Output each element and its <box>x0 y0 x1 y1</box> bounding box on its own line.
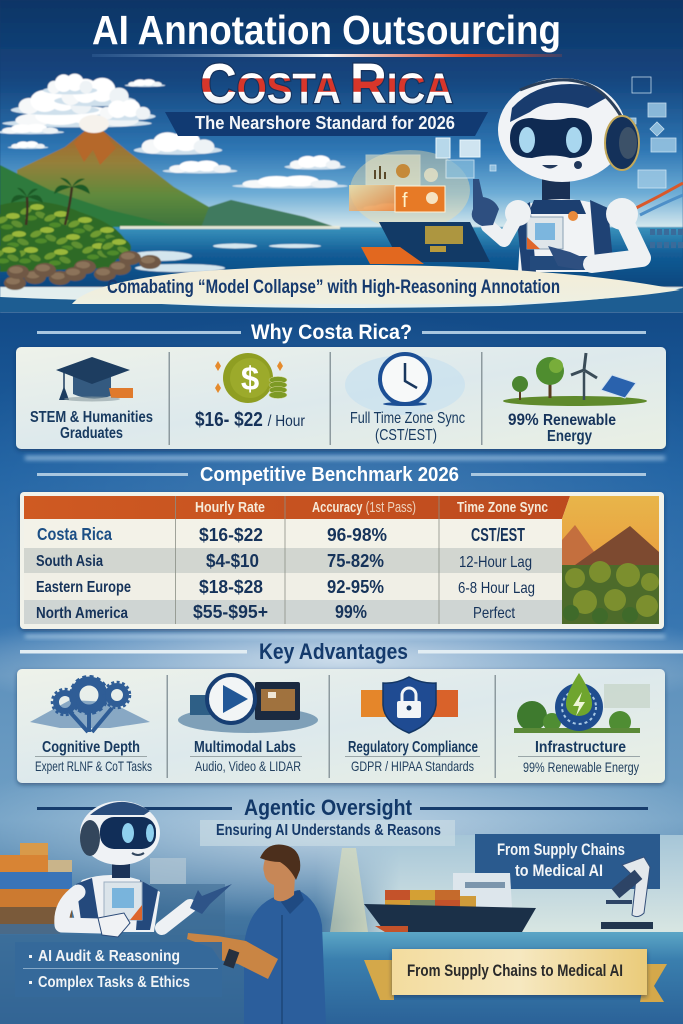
section heading: Competitive Benchmark 2026 <box>37 464 646 486</box>
section heading: Competitive Benchmark 2026: Competitive Benchmark 2026 <box>200 464 459 486</box>
robot head <box>498 78 626 182</box>
section heading: Why Costa Rica?: Why Costa Rica? <box>251 321 412 344</box>
light strip <box>25 456 665 460</box>
text: renewable energy <box>508 410 616 445</box>
icon: gears <box>30 676 150 732</box>
row: North America: Perfect <box>473 605 515 622</box>
tagline: Comabating “Model Collapse” with High-Reasoning Annotation <box>107 277 560 298</box>
table rows <box>24 519 562 548</box>
icon: infrastructure <box>514 673 650 733</box>
section heading: Key Advantages: Key Advantages <box>259 639 408 664</box>
callout: from supply chains box: From Supply Chains <box>497 841 625 859</box>
row: South Asia: 12-Hour Lag <box>459 554 532 571</box>
volcano smoke <box>79 115 109 133</box>
row: Eastern Europe: Eastern Europe <box>36 579 131 596</box>
clouds <box>0 74 444 211</box>
surf <box>120 226 340 272</box>
row: South Asia: 75-82% <box>327 551 384 571</box>
row: Eastern Europe <box>36 577 535 597</box>
text: STEM graduates: STEM & Humanities <box>30 409 153 426</box>
floating UI icons <box>490 77 676 188</box>
hologram data panels: f <box>402 190 408 212</box>
row: South Asia: $4-$10 <box>206 551 259 571</box>
row: Costa Rica: $16-$22 <box>199 525 263 545</box>
icon: clock <box>380 354 430 406</box>
panel: benchmark table <box>20 492 664 629</box>
robot illustration (top) <box>472 78 642 272</box>
robot head <box>80 801 160 865</box>
row: Costa Rica <box>37 524 525 545</box>
volcano <box>0 115 335 250</box>
text: regulatory compliance: Regulatory Compliance <box>348 739 478 756</box>
callout: from supply chains box <box>475 834 660 889</box>
subtitle banner: The Nearshore Standard for 2026 <box>195 113 455 133</box>
panel: why costa rica <box>16 347 666 449</box>
rocks <box>4 251 161 290</box>
text: infrastructure <box>518 739 640 775</box>
text: hourly rate: $16- $22 / Hour <box>195 409 306 431</box>
robot illustration (bottom) <box>62 801 232 937</box>
section heading: Key Advantages <box>20 639 683 664</box>
ribbon banner <box>364 949 667 1002</box>
light strip <box>25 635 665 638</box>
icon: microscope <box>601 857 653 929</box>
row: North America: $55-$95+ <box>193 602 268 622</box>
icon: multimodal play <box>178 675 318 733</box>
icon: graduation cap <box>56 357 133 402</box>
text: cognitive depth: Expert RLNF & CoT Tasks <box>35 758 152 774</box>
icon: renewable landscape <box>503 353 647 406</box>
ocean <box>0 227 683 287</box>
heading: Agentic Oversight <box>37 795 648 820</box>
row: Costa Rica: Costa Rica <box>37 524 112 544</box>
agentic scene background <box>150 820 683 1014</box>
torso <box>244 890 326 1024</box>
robot torso <box>70 875 160 932</box>
control platform <box>379 222 490 262</box>
person illustration <box>187 844 326 1024</box>
list: AI audit: AI Audit & Reasoning <box>38 948 180 965</box>
text: time zone sync: (CST/EST) <box>375 427 437 444</box>
robot body <box>518 199 614 272</box>
image: sunset mountain forest <box>562 496 659 624</box>
icon: coin: $ <box>241 360 259 397</box>
subheading: Ensuring AI Understands & Reasons <box>216 822 441 839</box>
text: multimodal labs <box>190 739 302 774</box>
ribbon banner: From Supply Chains to Medical AI <box>407 962 623 980</box>
icon: coin <box>215 353 287 403</box>
row: South Asia: South Asia <box>36 553 103 570</box>
head <box>263 851 299 901</box>
text: renewable energy: Energy <box>547 428 592 445</box>
section heading: Why Costa Rica? <box>37 321 646 344</box>
sea <box>310 932 683 1024</box>
row: North America: North America <box>36 605 128 622</box>
hologram data panels <box>349 138 490 264</box>
pointing arm <box>187 933 278 979</box>
robot right arm <box>606 198 638 230</box>
icon: compliance shield <box>361 677 458 733</box>
sand banner shape <box>0 265 683 312</box>
decorative arcs <box>636 183 683 245</box>
text: time zone sync <box>350 410 465 444</box>
text: infrastructure: 99% Renewable Energy <box>523 759 639 775</box>
title underline <box>92 54 562 57</box>
row: Costa Rica: 96-98% <box>327 525 387 545</box>
row: Eastern Europe: 92-95% <box>327 577 384 597</box>
robot arm right <box>162 906 190 928</box>
shipping containers <box>0 843 72 934</box>
heading: Agentic Oversight: Agentic Oversight <box>244 795 413 820</box>
row: Costa Rica: CST/EST <box>471 525 525 545</box>
table header: Accuracy (1st Pass) <box>312 500 416 516</box>
text: multimodal labs: Multimodal Labs <box>194 739 296 756</box>
text: regulatory compliance: GDPR / HIPAA Standards <box>351 758 474 774</box>
robot neck <box>542 178 570 200</box>
table header <box>24 496 570 519</box>
text: infrastructure: Infrastructure <box>535 739 626 756</box>
panel: key advantages <box>17 669 665 783</box>
callout: from supply chains box: to Medical AI <box>515 862 603 880</box>
table header: Time Zone Sync <box>457 500 548 516</box>
light sky behind clock <box>345 355 465 415</box>
text: cognitive depth: Cognitive Depth <box>42 739 140 756</box>
text: cognitive depth <box>35 739 152 774</box>
text: time zone sync: Full Time Zone Sync <box>350 410 465 427</box>
text: regulatory compliance <box>345 739 480 774</box>
jungle <box>0 201 131 272</box>
hero illustration: sky, volcano, coast <box>0 0 683 312</box>
table header: Hourly Rate <box>195 500 265 516</box>
palm trees <box>11 178 90 225</box>
row: North America: 99% <box>335 602 367 622</box>
robot arm left <box>62 892 100 926</box>
row: Eastern Europe: $18-$28 <box>199 577 263 597</box>
headphone <box>520 80 622 118</box>
title: AI Annotation Outsourcing <box>92 7 561 53</box>
container ship <box>364 873 536 932</box>
row: South Asia <box>36 551 532 571</box>
list: AI audit <box>15 942 222 997</box>
text: STEM graduates: Graduates <box>60 425 123 442</box>
list: AI audit: Complex Tasks & Ethics <box>38 974 190 991</box>
visor <box>510 118 592 158</box>
sunbeam <box>330 848 368 932</box>
row: North America <box>36 602 515 622</box>
heading: Costa Rica: COSTA RICA <box>200 52 453 116</box>
robot left arm <box>505 200 531 226</box>
text: STEM graduates <box>30 409 153 442</box>
text: renewable energy: 99% Renewable <box>508 410 616 429</box>
row: Eastern Europe: 6-8 Hour Lag <box>458 580 535 597</box>
text: multimodal labs: Audio, Video & LIDAR <box>195 758 301 774</box>
